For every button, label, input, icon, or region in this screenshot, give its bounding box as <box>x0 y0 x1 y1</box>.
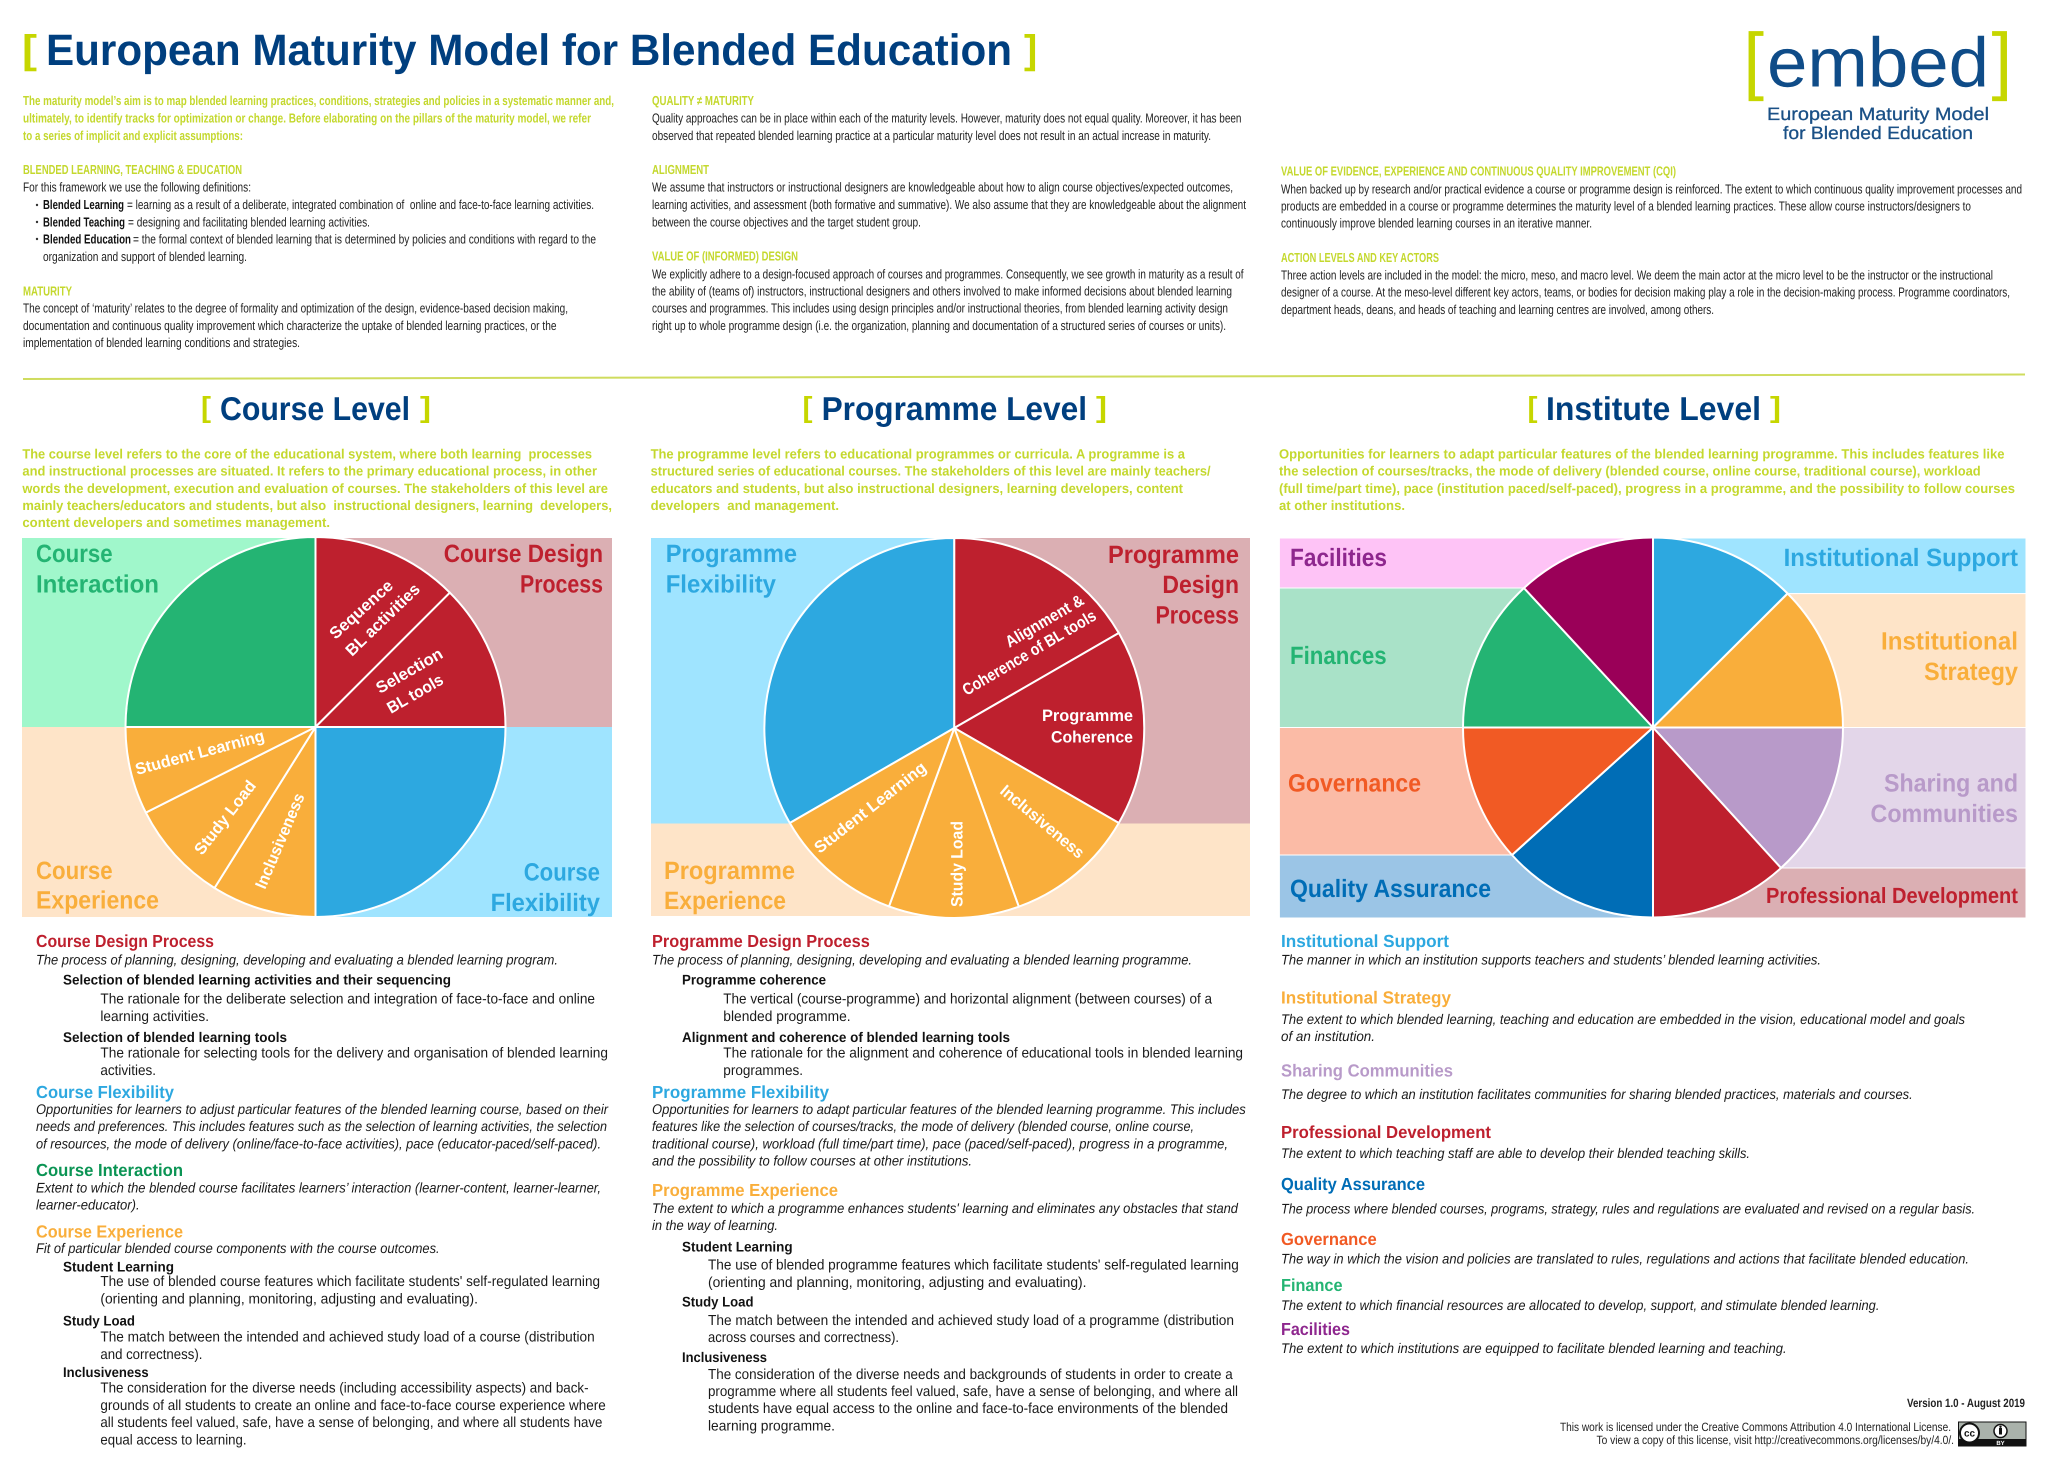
definitions: institute level: The extent to which teaching staff are able to develop their blended teaching skills. <box>1281 1145 1750 1161</box>
icon: CC BY badge: cc <box>1964 1428 1975 1440</box>
intro text: institute level <box>1279 447 2015 513</box>
text block: value of informed design: right up to whole programme design (i.e. the organization, planning and documentation of a structured series of courses or units). <box>652 318 1226 333</box>
pie chart: course level: Course <box>524 859 600 887</box>
pie chart: course level: BL tools <box>384 671 447 717</box>
pie chart: programme level: Alignment & <box>1002 591 1087 651</box>
heading: institute level: Institute Level <box>1546 390 1761 427</box>
pie chart: course level: Course Design <box>444 540 603 568</box>
intro text: programme level: developers and management. <box>651 498 839 513</box>
pie chart: course level: Sequence <box>326 577 397 643</box>
intro column 2 <box>652 93 1246 333</box>
panel: institute level <box>1279 390 2026 1356</box>
text block: maturity <box>23 284 568 350</box>
pie chart: course level: Interaction <box>36 570 159 598</box>
definitions: programme level <box>652 931 1246 1435</box>
text block: blended learning, teaching and education: = designing and facilitating blended learning activities. <box>128 214 370 230</box>
text block: alignment: learning activities, and assessment (both formative and summative). We also assume that they are knowledgeable about the alignment <box>652 197 1246 212</box>
pie chart: institute level: Finances <box>1290 642 1387 670</box>
text block: maturity: The concept of ‘maturity’ relates to the degree of formality and optimization of the design, evidence-based decision making, <box>23 300 568 315</box>
definitions: programme level: The extent to which a programme enhances students' learning and eliminates any obstacles that stand <box>652 1200 1239 1216</box>
definitions: course level <box>36 931 609 1449</box>
definitions: institute level: The way in which the vision and policies are translated to rules, regulations and actions that facilitate blended education. <box>1281 1251 1969 1267</box>
intro text: institute level: at other institutions. <box>1279 498 1405 513</box>
pie chart: programme level: Inclusiveness <box>996 782 1088 862</box>
definitions: course level: Student Learning <box>63 1258 174 1274</box>
definitions: programme level: The use of blended programme features which facilitate students' self-regulated learning <box>708 1258 1239 1274</box>
text block: maturity: implementation of blended learning conditions and strategies. <box>23 335 300 350</box>
definitions: programme level: students have equal access to the online and face-to-face environments of the blended <box>708 1401 1228 1417</box>
definitions: course level: Fit of particular blended course components with the course outcomes. <box>36 1240 440 1256</box>
pie chart: institute level: Institutional Support <box>1784 544 2019 572</box>
definitions: course level: learner-educator). <box>36 1197 140 1213</box>
pie chart: programme level: Process <box>1156 602 1239 630</box>
intro text: course level: The course level refers to the core of the educational system, where both learning processes <box>22 447 592 462</box>
license text: This work is licensed under the Creative Commons Attribution 4.0 International License. <box>1560 1420 1951 1434</box>
definitions: course level: and correctness). <box>100 1347 202 1363</box>
definitions: programme level: The consideration of the diverse needs and backgrounds of students in order to create a <box>708 1367 1234 1383</box>
pie chart: course level: Inclusiveness <box>252 791 309 892</box>
pie chart: institute level: Communities <box>1870 800 2018 828</box>
definitions: institute level: The process where blended courses, programs, strategy, rules and regulations are evaluated and revised on a regular basis. <box>1281 1200 1975 1216</box>
intro text: programme level: The programme level refers to educational programmes or curricula. A programme is a <box>651 447 1185 462</box>
text block: quality is not maturity: QUALITY ≠ MATURITY <box>652 93 754 108</box>
heading: course level: ] <box>420 392 431 424</box>
pie chart: course level: Selection <box>373 645 446 697</box>
definitions: institute level: of an institution. <box>1281 1028 1375 1044</box>
license text <box>1560 1420 1954 1447</box>
definitions: course level: needs and preferences. This includes features such as the selection of learning activities, the selection <box>36 1118 607 1134</box>
text block: blended learning, teaching and education <box>23 162 596 264</box>
definitions: institute level: Sharing Communities <box>1281 1060 1453 1080</box>
definitions: institute level: Institutional Support <box>1281 931 1449 951</box>
intro statement: ultimately, to identify tracks for optimization or change. Before elaborating on the pillars of the maturity model, we refer <box>23 111 591 126</box>
logo: embed: embed <box>1767 24 1989 102</box>
pie chart: course level: Study Load <box>191 777 260 858</box>
text block: blended learning, teaching and education: BLENDED LEARNING, TEACHING & EDUCATION <box>23 162 242 177</box>
definitions: course level: Study Load <box>63 1312 135 1328</box>
intro text: institute level: Opportunities for learners to adapt particular features of the blended learning programme. This includes features like <box>1279 447 2005 462</box>
definitions: course level: Course Design Process <box>36 931 214 951</box>
definitions: course level: The process of planning, designing, developing and evaluating a blended learning program. <box>36 951 558 967</box>
definitions: programme level: learning programme. <box>708 1419 835 1435</box>
text block: maturity: MATURITY <box>23 284 72 299</box>
definitions: course level: The consideration for the diverse needs (including accessibility aspects) and back- <box>100 1381 589 1397</box>
text block: evidence and CQI <box>1281 164 2022 231</box>
title: [ <box>22 28 37 72</box>
text block: action levels and key actors: department heads, deans, and heads of teaching and learning centres are involved, among others. <box>1281 302 1714 317</box>
text block: maturity: documentation and continuous quality improvement which characterize the uptake of blended learning practices, or the <box>23 318 556 333</box>
definitions: programme level: Study Load <box>682 1294 754 1310</box>
definitions: institute level: Facilities <box>1281 1319 1350 1339</box>
definitions: programme level: blended programme. <box>723 1009 851 1025</box>
pie chart: programme level: Experience <box>664 887 786 915</box>
definitions: programme level: and the possibility to follow courses at other institutions. <box>652 1153 972 1169</box>
text block: evidence and CQI: continuously improve blended learning courses in an iterative manner. <box>1281 216 1592 231</box>
intro text: course level: words the development, execution and evaluation of courses. The stakeholders of this level are <box>21 481 608 496</box>
pie chart: institute level: Facilities <box>1290 544 1387 572</box>
definitions: institute level: Finance <box>1281 1275 1343 1295</box>
pie chart: course level: Course <box>36 540 113 568</box>
text block: blended learning, teaching and education: For this framework we use the following definitions: <box>23 180 251 195</box>
pie chart: programme level: Design <box>1162 571 1239 599</box>
pie chart: programme level: Study Load <box>948 821 966 907</box>
intro text: programme level: educators and students, but also instructional designers, learning developers, content <box>651 481 1183 496</box>
text block: blended learning, teaching and education: Blended Learning <box>43 197 124 212</box>
text block: blended learning, teaching and education: = the formal context of blended learning that is determined by policies and conditions with regard to the <box>133 232 596 246</box>
text block: quality is not maturity: observed that repeated blended learning practice at a particular maturity level does not result in an actual increase in maturity. <box>652 128 1211 143</box>
pie chart: programme level: Programme <box>1108 541 1239 569</box>
intro text: programme level <box>651 447 1211 513</box>
definitions: programme level: The vertical (course-programme) and horizontal alignment (between courses) of a <box>723 992 1213 1008</box>
intro text: course level: content developers and sometimes management. <box>22 515 330 530</box>
definitions: institute level: Institutional Strategy <box>1281 988 1451 1008</box>
definitions: course level: Inclusiveness <box>63 1364 149 1380</box>
text block: alignment: We assume that instructors or instructional designers are knowledgeable about how to align course objectives/expected outcomes, <box>652 180 1233 195</box>
text block: quality is not maturity <box>652 93 1242 143</box>
text block: value of informed design: VALUE OF (INFORMED) DESIGN <box>652 249 798 264</box>
definitions: programme level: The match between the intended and achieved study load of a programme (distribution <box>708 1313 1234 1329</box>
logo: embed: ] <box>1992 18 2012 102</box>
definitions: course level: The use of blended course features which facilitate students' self-regulated learning <box>100 1274 600 1290</box>
pie chart: course level: BL activities <box>342 580 424 660</box>
definitions: course level: Course Experience <box>36 1222 183 1242</box>
text block: value of informed design: We explicitly adhere to a design-focused approach of courses and programmes. Consequently, we see growth in maturity as a result of <box>652 266 1244 281</box>
text block: blended learning, teaching and education: = learning as a result of a deliberate, integrated combination of online and face-to-face learning activities. <box>127 197 594 212</box>
definitions: course level: of resources, the mode of delivery (online/face-to-face activities), pace (educator-paced/self-paced). <box>36 1135 601 1151</box>
text block: evidence and CQI: VALUE OF EVIDENCE, EXPERIENCE AND CONTINUOUS QUALITY IMPROVEMENT (CQI) <box>1281 164 1676 179</box>
definitions: programme level: Opportunities for learners to adapt particular features of the blended learning programme. This includes <box>652 1101 1246 1117</box>
pie chart: programme level: Programme <box>664 857 795 885</box>
version note: Version 1.0 - August 2019 <box>1907 1396 2025 1410</box>
definitions: programme level: traditional course), workload (full time/part time), pace (paced/self-paced), progress in a programme, <box>652 1135 1228 1151</box>
definitions: course level: Opportunities for learners to adjust particular features of the blended learning course, based on their <box>36 1101 609 1117</box>
definitions: course level: all students feel valued, safe, have a sense of belonging, and where all students have <box>100 1415 602 1431</box>
pie chart: course level: Flexibility <box>491 889 600 917</box>
logo: embed: [ <box>1743 18 1764 102</box>
intro statement: The maturity model’s aim is to map blended learning practices, conditions, strategies and policies in a systematic manner and, <box>23 93 614 108</box>
text block: action levels and key actors <box>1281 250 2010 317</box>
license text: To view a copy of this license, visit http://creativecommons.org/licenses/by/4.0/. <box>1596 1433 1954 1447</box>
definitions: institute level: The manner in which an institution supports teachers and students’ blended learning activities. <box>1281 951 1821 967</box>
heading: course level: [ <box>201 392 211 424</box>
text block: alignment: between the course objectives and the target student group. <box>652 214 921 230</box>
intro text: course level: mainly teachers/educators and students, but also instructional designers, learning developers, <box>22 498 612 513</box>
definitions: institute level: Professional Development <box>1281 1122 1491 1142</box>
heading: institute level: ] <box>1770 392 1781 424</box>
pie chart: institute level: Sharing and <box>1884 769 2018 797</box>
panel: course level <box>21 390 612 1449</box>
text block: action levels and key actors: ACTION LEVELS AND KEY ACTORS <box>1281 250 1439 265</box>
icon: CC BY badge <box>1958 1422 2026 1447</box>
definitions: programme level: programmes. <box>723 1063 803 1079</box>
definitions: programme level: Programme coherence <box>682 972 826 988</box>
definitions: programme level: Programme Experience <box>652 1180 838 1200</box>
definitions: institute level: The extent to which financial resources are allocated to develop, support, and stimulate blended learning. <box>1281 1297 1879 1313</box>
heading: programme level: [ <box>802 392 813 424</box>
text block: alignment <box>652 162 1246 230</box>
definitions: institute level: The extent to which blended learning, teaching and education are embedded in the vision, educational model and goals <box>1281 1011 1965 1027</box>
definitions: course level: grounds of all students to create an online and face-to-face course experience where <box>100 1398 606 1414</box>
icon: CC BY badge: BY <box>1996 1440 2005 1447</box>
text block: value of informed design: the ability of (teams of) instructors, instructional designers and others involved to make informed decisions about blended learning <box>652 284 1232 299</box>
definitions: programme level: Student Learning <box>682 1238 793 1254</box>
text block: alignment: ALIGNMENT <box>652 162 709 177</box>
intro column 1 <box>23 93 614 350</box>
intro statement <box>23 93 614 143</box>
intro column 3 <box>1281 164 2022 317</box>
pie chart: programme level: Programme <box>1042 707 1133 725</box>
logo: embed <box>1743 18 2012 143</box>
definitions: institute level: The degree to which an institution facilitates communities for sharing blended practices, materials and courses. <box>1281 1086 1913 1102</box>
intro text: institute level: (full time/part time), pace (institution paced/self-paced), progress in a programme, and the possibility to follow courses <box>1279 481 2015 496</box>
text block: blended learning, teaching and education: organization and support of blended learning. <box>43 249 247 264</box>
definitions: course level: Course Flexibility <box>36 1082 174 1102</box>
definitions: programme level: Inclusiveness <box>682 1349 767 1365</box>
definitions: programme level: The rationale for the alignment and coherence of educational tools in blended learning <box>723 1046 1243 1062</box>
logo: embed: European Maturity Model <box>1767 104 1989 124</box>
text block: quality is not maturity: Quality approaches can be in place within each of the maturity levels. However, maturity does not equal quality. Moreover, it has been <box>652 111 1242 126</box>
intro statement: to a series of implicit and explicit assumptions: <box>23 128 243 143</box>
intro text: programme level: structured series of educational courses. The stakeholders of this level are mainly teachers/ <box>651 464 1211 479</box>
definitions: course level: equal access to learning. <box>100 1433 247 1449</box>
pie chart: programme level <box>651 538 1250 918</box>
definitions: course level: The match between the intended and achieved study load of a course (distribution <box>100 1330 595 1346</box>
heading: course level: Course Level <box>220 390 410 427</box>
pie chart: programme level: Programme <box>666 540 797 568</box>
pie chart: course level: Experience <box>36 887 159 915</box>
pie chart: programme level: Coherence <box>1051 728 1133 746</box>
definitions: course level: Extent to which the blended course facilitates learners’ interaction (learner-content, learner-learner, <box>36 1179 601 1195</box>
definitions: course level: Selection of blended learning activities and their sequencing <box>63 972 451 988</box>
definitions: institute level <box>1281 931 1975 1356</box>
definitions: programme level: (orienting and planning, monitoring, adjusting and evaluating). <box>708 1275 1086 1291</box>
pie chart: institute level: Institutional <box>1881 628 2018 656</box>
definitions: course level: learning activities. <box>100 1009 209 1025</box>
definitions: programme level: programme where all students feel valued, safe, have a sense of belonging, and where all <box>708 1384 1238 1400</box>
definitions: programme level: Programme Design Process <box>652 931 870 951</box>
pie chart: institute level: Professional Development <box>1766 883 2019 908</box>
pie chart: institute level: Governance <box>1288 769 1421 797</box>
text block: value of informed design: courses and programmes. This includes using design principles and/or instructional theories, from blended learning activity design <box>652 301 1228 316</box>
pie chart: course level: Process <box>520 570 603 598</box>
heading: programme level: Programme Level <box>822 390 1087 427</box>
intro text: course level: and instructional processes are situated. It refers to the primary educational process, in other <box>22 464 598 479</box>
definitions: course level: Course Interaction <box>36 1160 183 1180</box>
definitions: course level: The rationale for selecting tools for the delivery and organisation of blended learning <box>100 1046 608 1062</box>
definitions: programme level: The process of planning, designing, developing and evaluating a blended learning programme. <box>652 951 1192 967</box>
pie chart: course level: Course <box>36 857 113 885</box>
pie chart: course level <box>22 537 612 917</box>
text block: value of informed design <box>652 249 1244 333</box>
intro text: institute level: the selection of courses/tracks, the mode of delivery (blended course, online course, traditional course), workload <box>1279 464 1981 479</box>
definitions: course level: The rationale for the deliberate selection and integration of face-to-face and online <box>100 992 595 1008</box>
pie chart: programme level: Flexibility <box>666 570 776 598</box>
text block: blended learning, teaching and education: Blended Teaching <box>43 214 125 230</box>
definitions: institute level: Quality Assurance <box>1281 1174 1425 1194</box>
definitions: course level: activities. <box>100 1063 156 1079</box>
pie chart: institute level: Quality Assurance <box>1290 875 1491 903</box>
definitions: programme level: Alignment and coherence of blended learning tools <box>682 1029 1010 1045</box>
heading: programme level: ] <box>1096 392 1107 424</box>
definitions: course level: (orienting and planning, monitoring, adjusting and evaluating). <box>100 1291 478 1307</box>
panel: programme level <box>651 390 1250 1435</box>
definitions: programme level: features like the selection of courses/tracks, the mode of delivery (blended course, online course, <box>652 1118 1194 1134</box>
definitions: course level: Selection of blended learning tools <box>63 1029 287 1045</box>
pie chart: programme level: Coherence of BL tools <box>959 607 1099 699</box>
heading: institute level: [ <box>1528 392 1538 424</box>
definitions: institute level: The extent to which institutions are equipped to facilitate blended learning and teaching. <box>1281 1340 1787 1356</box>
pie chart: course level: Student Learning <box>133 727 267 779</box>
pie chart: programme level: Student Learning <box>811 759 930 857</box>
text block: blended learning, teaching and education: Blended Education <box>43 232 131 246</box>
intro text: course level <box>21 447 612 530</box>
pie chart: institute level <box>1279 538 2026 918</box>
logo: embed: for Blended Education <box>1783 123 1973 143</box>
definitions: programme level: across courses and correctness). <box>708 1330 899 1346</box>
pie chart: institute level: Strategy <box>1924 658 2018 686</box>
definitions: programme level: Programme Flexibility <box>652 1082 829 1102</box>
title: European Maturity Model for Blended Education <box>46 26 1012 75</box>
definitions: institute level: Governance <box>1281 1229 1377 1249</box>
definitions: programme level: in the way of learning. <box>652 1217 778 1233</box>
title: ] <box>1024 28 1037 72</box>
